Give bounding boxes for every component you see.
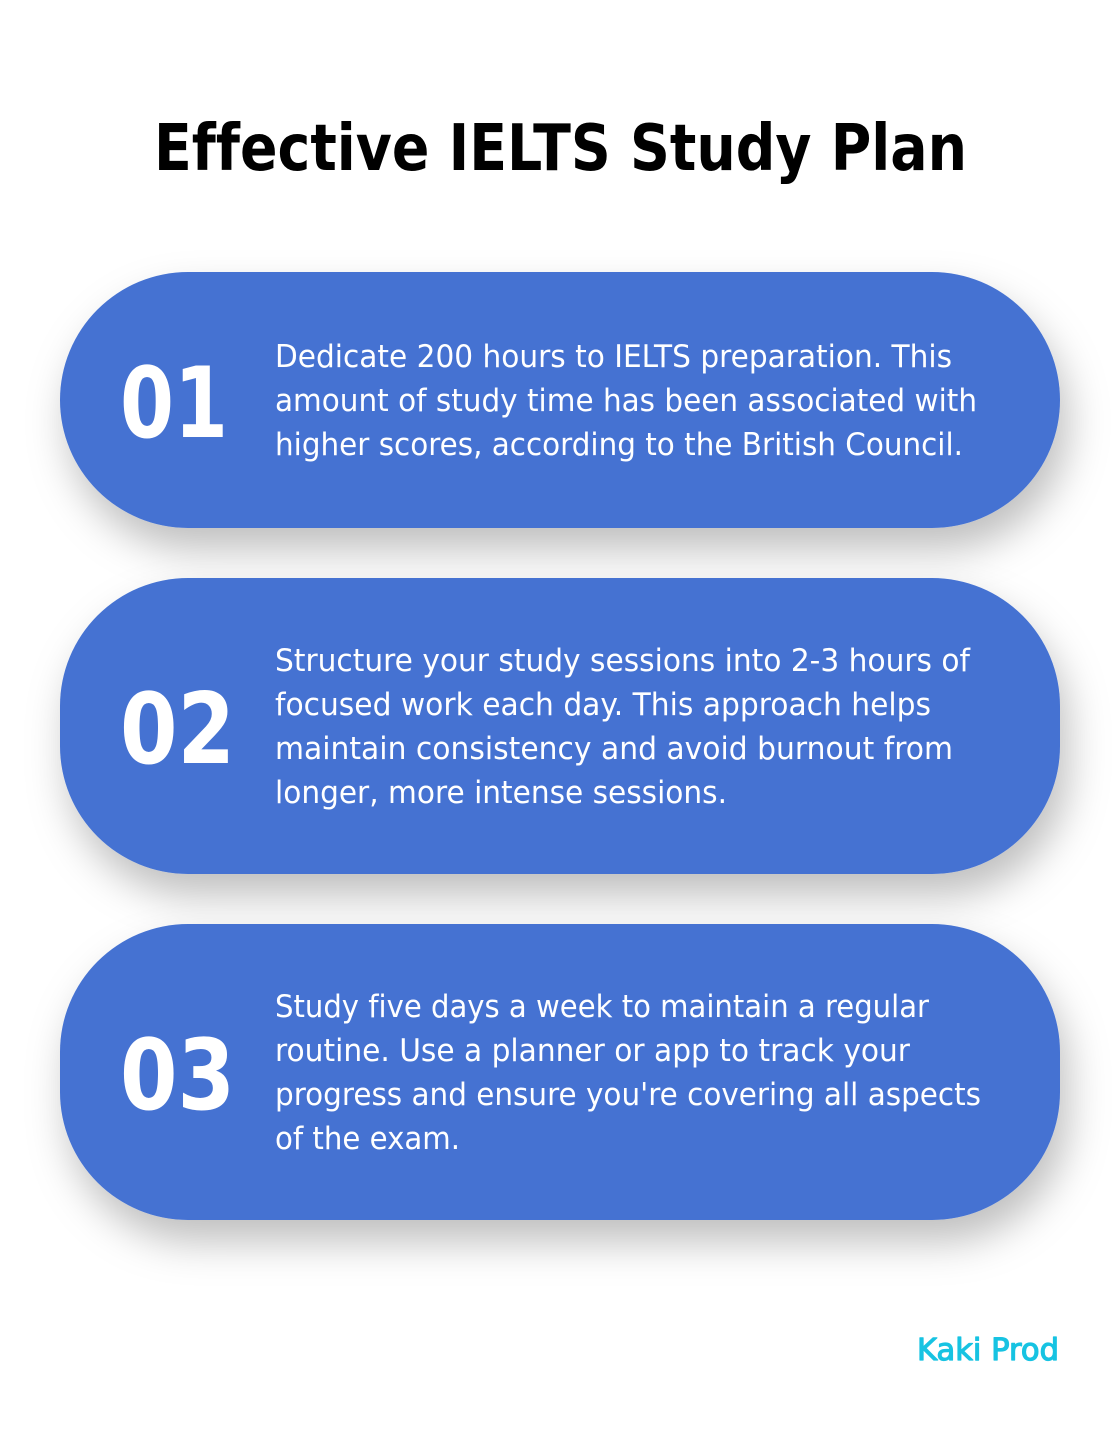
text block 03: Study five days a week to maintain a regular [275,989,929,1025]
panel: step 01 [60,272,1060,528]
title: Effective IELTS Study Plan [154,112,967,186]
text block 01: amount of study time has been associated with [275,383,977,419]
text block 02: maintain consistency and avoid burnout from [275,731,953,767]
number 01: 01 [120,347,228,461]
card background 01 [60,272,1060,528]
text block 02: longer, more intense sessions. [275,775,727,811]
text block 03: routine. Use a planner or app to track your [275,1033,910,1069]
number 02: 02 [120,673,235,787]
text block 02: Structure your study sessions into 2-3 hours of [275,643,971,679]
text block 03 [275,989,981,1157]
text block 01: higher scores, according to the British Council. [275,427,963,463]
panel: step 02 [60,578,1060,874]
text block 01 [275,339,977,463]
text block 03: of the exam. [275,1121,460,1157]
panel: step 03 [60,924,1060,1220]
card background 03 [60,924,1060,1220]
logo: Kaki Prod: Kaki Prod [917,1333,1059,1368]
card background 02 [60,578,1060,874]
text block 03: progress and ensure you're covering all aspects [275,1077,981,1113]
text block 02 [275,643,971,811]
number 03: 03 [120,1019,235,1133]
text block 02: focused work each day. This approach helps [275,687,931,723]
text block 01: Dedicate 200 hours to IELTS preparation. This [275,339,952,375]
